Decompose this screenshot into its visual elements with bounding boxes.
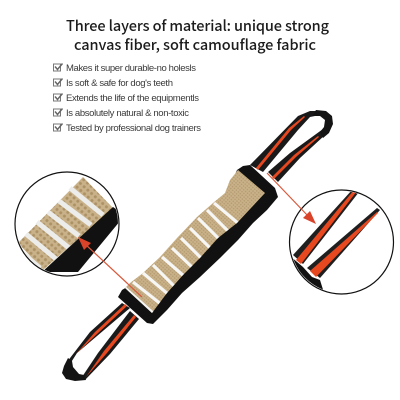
- strap close-up: [293, 192, 380, 290]
- circle outline: [15, 172, 119, 276]
- right zoom circle: [290, 190, 394, 296]
- title: Three layers of material: unique strong: [66, 15, 330, 36]
- jute bite tug body: [118, 165, 278, 324]
- feature checklist: [54, 63, 201, 134]
- item: tested: Tested by professional dog trainers: [66, 123, 201, 134]
- left zoom circle: [14, 172, 125, 276]
- circle outline: [290, 190, 394, 294]
- fabric close-up: [19, 177, 118, 272]
- item: soft: Is soft & safe for dog's teeth: [66, 78, 173, 89]
- top strap loop: [250, 110, 333, 182]
- arrow to right circle: [267, 173, 316, 224]
- bottom strap loop: [62, 303, 139, 381]
- title: [66, 15, 330, 55]
- white stripes: [125, 203, 239, 314]
- title: canvas fiber, soft camouflage fabric: [74, 34, 316, 55]
- item: natural: Is absolutely natural & non-toxic: [66, 108, 189, 119]
- jute fabric: [125, 170, 265, 313]
- item: durable: Makes it super durable-no holesls: [66, 63, 196, 74]
- black border: [118, 165, 278, 324]
- item: life: Extends the life of the equipmentls: [66, 93, 199, 104]
- arrow to left circle: [78, 237, 142, 297]
